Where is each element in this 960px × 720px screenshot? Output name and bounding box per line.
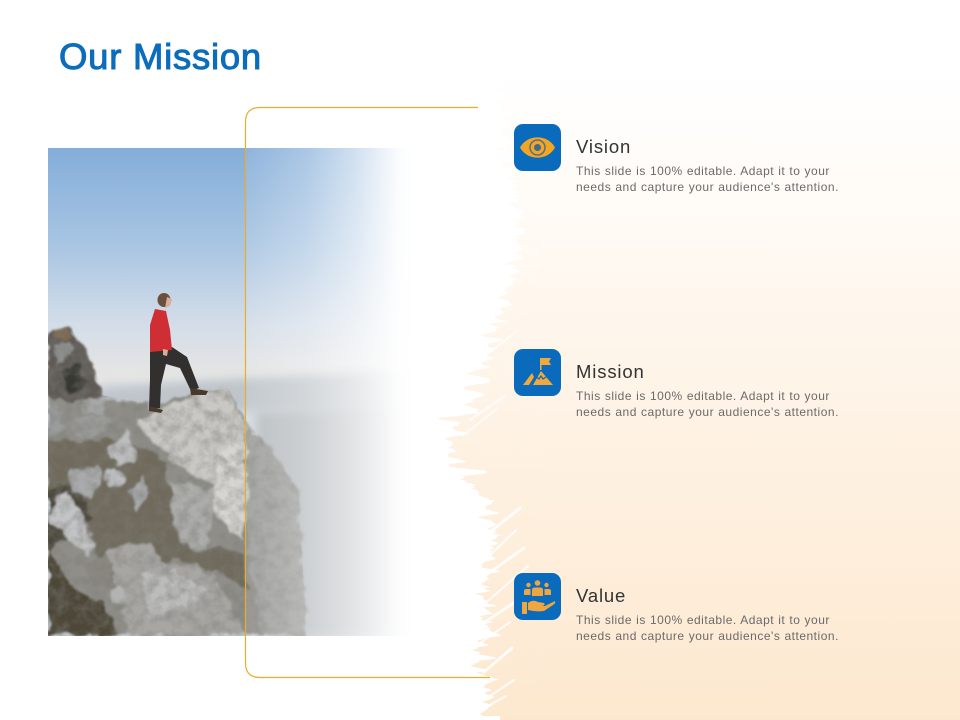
text: value description: This slide is 100% editable. Adapt it to your (576, 613, 830, 627)
rock texture (48, 320, 310, 636)
main rock mass (48, 327, 306, 636)
value item (514, 573, 839, 643)
text: mission description (576, 389, 839, 419)
text: vision description: needs and capture your audience's attention. (576, 180, 839, 194)
icon: people on hand (514, 573, 561, 620)
text: vision description: This slide is 100% editable. Adapt it to your (576, 164, 830, 178)
lit rock face (136, 386, 250, 486)
vision item (514, 124, 839, 194)
text: value description (576, 613, 839, 643)
photo: hiker on mountain (48, 148, 394, 636)
heading: mission: Mission (576, 361, 645, 382)
text: vision description (576, 164, 839, 194)
icon: eye (514, 124, 561, 171)
left crag (48, 327, 102, 405)
foreground boulders (108, 542, 245, 636)
text: mission description: This slide is 100% editable. Adapt it to your (576, 389, 830, 403)
heading: value: Value (576, 585, 626, 606)
mission item (514, 349, 839, 419)
icon: mountain with flag (514, 349, 561, 396)
text: value description: needs and capture your audience's attention. (576, 629, 839, 643)
distant mountains (102, 373, 374, 413)
scrub and shadow (48, 440, 246, 590)
heading: vision: Vision (576, 136, 631, 157)
title: Our Mission (59, 36, 262, 77)
hiker figure (149, 293, 208, 413)
small boulders (68, 465, 104, 498)
fade overlay (245, 148, 420, 636)
text: mission description: needs and capture your audience's attention. (576, 405, 839, 419)
